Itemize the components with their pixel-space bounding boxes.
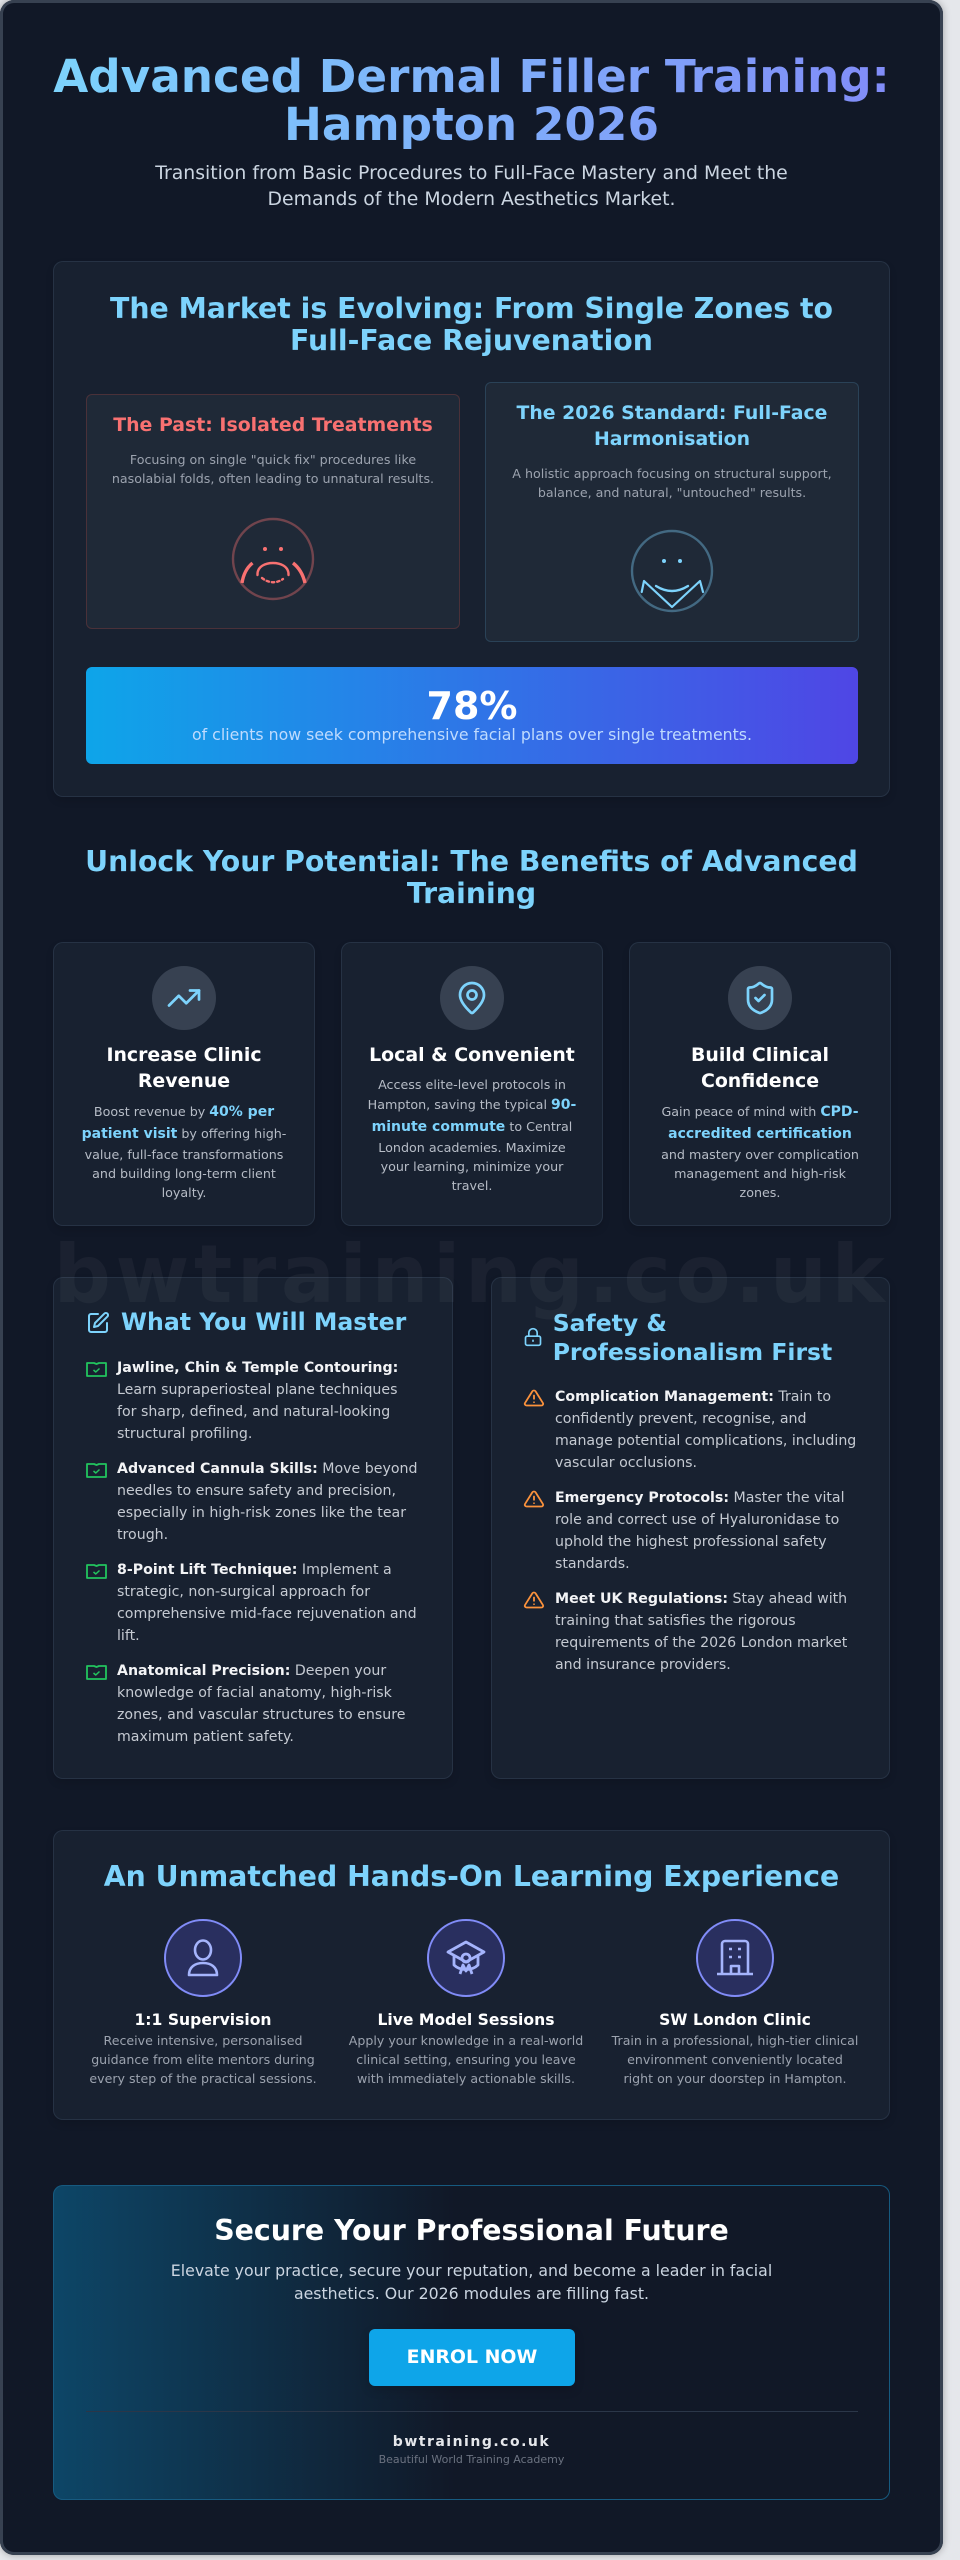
benefit text: minute commute to Central <box>372 1119 572 1135</box>
feature text: every step of the practical sessions. <box>89 2071 317 2086</box>
feature text: with immediately actionable skills. <box>357 2071 575 2086</box>
benefit card: confidence <box>629 942 891 1226</box>
list text: especially in high-risk zones like the tear <box>117 1505 406 1521</box>
list text: knowledge of facial anatomy, high-risk <box>117 1685 392 1701</box>
benefit text: Gain peace of mind with CPD- <box>661 1104 859 1120</box>
benefit card: local <box>341 942 603 1226</box>
benefit text: value, full-face transformations <box>85 1146 283 1162</box>
benefit text: your learning, minimize your <box>381 1159 563 1174</box>
feature text: clinical setting, ensuring you leave <box>356 2052 576 2067</box>
title: Advanced Dermal Filler Training: <box>53 50 890 103</box>
list text: Emergency Protocols: Master the vital <box>555 1490 845 1506</box>
benefit title: Increase Clinic <box>106 1044 262 1066</box>
list text: training that satisfies the rigorous <box>555 1612 796 1628</box>
list text: vascular occlusions. <box>555 1454 697 1470</box>
card: the 2026 standard <box>485 382 859 642</box>
panel: safety <box>491 1277 890 1779</box>
icon: pencil square <box>88 1312 109 1333</box>
heading: experience: An Unmatched Hands-On Learning Experience <box>104 1860 839 1893</box>
icon: check <box>86 1665 107 1680</box>
list item: emergency <box>524 1490 845 1572</box>
benefit title: Confidence <box>701 1070 819 1092</box>
feature text <box>341 2031 591 2088</box>
list text: Learn supraperiosteal plane techniques <box>117 1382 397 1398</box>
icon: check <box>86 1463 107 1478</box>
card text: past: Focusing on single "quick fix" procedures like <box>130 452 416 467</box>
benefit text: accredited certification <box>668 1126 852 1142</box>
subtitle: Demands of the Modern Aesthetics Market. <box>268 188 675 210</box>
panel: hands-on experience <box>53 1830 890 2120</box>
card heading: 2026 standard: The 2026 Standard: Full-Face <box>517 403 827 424</box>
icon: graduation cap <box>427 1919 505 1997</box>
feature text <box>78 2031 328 2088</box>
heading: master: What You Will Master <box>121 1308 406 1336</box>
feature title: 1:1 Supervision <box>134 2011 272 2029</box>
cta text <box>53 2260 890 2305</box>
card text: 2026 standard: balance, and natural, "untouched" results. <box>538 485 806 500</box>
card heading: past: The Past: Isolated Treatments <box>113 414 433 436</box>
list item: lift <box>86 1562 417 1644</box>
benefit text: patient visit by offering high- <box>82 1126 286 1142</box>
card text: past: nasolabial folds, often leading to unnatural results. <box>112 471 434 486</box>
panel: market evolving <box>53 261 890 797</box>
heading: benefits: Unlock Your Potential: The Benefits of Advanced <box>85 845 858 878</box>
academy name: Beautiful World Training Academy <box>379 2453 564 2466</box>
feature text: Receive intensive, personalised <box>104 2033 302 2048</box>
benefit text <box>661 1104 859 1200</box>
benefit text: loyalty. <box>162 1184 206 1200</box>
feature text: right on your doorstep in Hampton. <box>624 2071 846 2086</box>
card text: 2026 standard: A holistic approach focusing on structural support, <box>512 466 832 481</box>
list text: and insurance providers. <box>555 1656 731 1672</box>
subtitle <box>155 162 788 210</box>
stat number: 78% <box>427 684 517 728</box>
icon: map pin <box>440 966 504 1030</box>
list text: requirements of the 2026 London market <box>555 1634 847 1650</box>
feature text: environment conveniently located <box>627 2052 843 2067</box>
heading: market <box>110 292 833 356</box>
feature text: Train in a professional, high-tier clinical <box>612 2033 858 2048</box>
list text: needles to ensure safety and precision, <box>117 1483 396 1499</box>
icon: isolated treatment face <box>232 518 314 600</box>
list text: manage potential complications, including <box>555 1432 856 1448</box>
benefit title: Build Clinical <box>691 1044 829 1066</box>
card heading: 2026 standard: Harmonisation <box>594 429 750 450</box>
list text: structural profiling. <box>117 1426 252 1442</box>
list text: Advanced Cannula Skills: Move beyond <box>117 1461 417 1477</box>
list item: complications <box>524 1388 856 1470</box>
list text: trough. <box>117 1527 168 1543</box>
button: enrol now <box>369 2329 575 2386</box>
benefit text: management and high-risk <box>674 1166 846 1180</box>
list text <box>117 1663 405 1745</box>
heading: benefits <box>85 845 858 910</box>
card: the past <box>86 394 460 629</box>
card text: 2026 standard <box>512 466 832 500</box>
panel: call to action <box>53 2185 890 2500</box>
list text <box>555 1490 845 1572</box>
card text: past <box>112 452 434 486</box>
benefit text: travel. <box>452 1178 492 1193</box>
icon: harmonised face <box>630 530 714 612</box>
icon: check <box>86 1362 107 1377</box>
benefit title: Local & Convenient <box>369 1044 575 1066</box>
benefit text <box>368 1077 576 1193</box>
list text <box>116 1360 398 1442</box>
list text <box>555 1388 856 1470</box>
list text: zones, and vascular structures to ensure <box>117 1707 405 1723</box>
icon: shield check <box>728 966 792 1030</box>
list text: standards. <box>555 1556 630 1572</box>
icon: person <box>164 1919 242 1997</box>
icon: building <box>696 1919 774 1997</box>
benefit text <box>82 1104 286 1200</box>
watermark: bwtraining.co.uk <box>54 1228 889 1321</box>
list text: Meet UK Regulations: Stay ahead with <box>555 1590 847 1606</box>
list text: Jawline, Chin & Temple Contouring: <box>117 1360 398 1376</box>
list text: Anatomical Precision: Deepen your <box>117 1663 386 1679</box>
benefit text: Boost revenue by 40% per <box>94 1104 274 1120</box>
heading: safety: Professionalism First <box>553 1338 832 1366</box>
button: enrol now: ENROL NOW <box>407 2346 537 2368</box>
benefit text: and mastery over complication <box>661 1146 859 1162</box>
heading: market: Full-Face Rejuvenation <box>290 324 653 356</box>
benefit card: revenue <box>53 942 315 1226</box>
list text: strategic, non-surgical approach for <box>117 1584 370 1600</box>
feature title: SW London Clinic <box>659 2011 811 2029</box>
heading: safety <box>553 1309 832 1366</box>
feature text: Apply your knowledge in a real-world <box>349 2033 583 2048</box>
list item: anatomy <box>86 1663 405 1745</box>
benefit text: London academies. Maximize <box>378 1140 566 1155</box>
list text <box>117 1461 417 1543</box>
icon: trending up <box>152 966 216 1030</box>
list text: Complication Management: Train to <box>555 1388 831 1404</box>
title <box>53 50 890 151</box>
icon: warning <box>524 1390 544 1406</box>
title: Hampton 2026 <box>284 98 659 151</box>
list text: role and correct use of Hyaluronidase to <box>555 1512 839 1528</box>
stat banner <box>86 667 858 764</box>
list text: maximum patient safety. <box>117 1729 294 1745</box>
benefit text: and building long-term client <box>92 1166 276 1180</box>
panel: what you will master <box>53 1277 453 1779</box>
feature: supervision <box>78 1919 328 2089</box>
list item: jawline <box>86 1360 398 1442</box>
list text <box>117 1562 417 1644</box>
icon: check <box>86 1564 107 1579</box>
icon: warning <box>524 1490 544 1508</box>
website: bwtraining.co.uk <box>393 2434 550 2450</box>
benefit title <box>691 1044 829 1092</box>
feature title: Live Model Sessions <box>377 2011 554 2029</box>
icon: warning <box>524 1592 544 1608</box>
cta text: Elevate your practice, secure your reputation, and become a leader in facial <box>171 2261 772 2280</box>
heading: market: The Market is Evolving: From Single Zones to <box>110 292 833 325</box>
benefit text: zones. <box>740 1184 780 1200</box>
benefit text: Hampton, saving the typical 90- <box>368 1097 576 1113</box>
list text: lift. <box>117 1628 140 1644</box>
cta heading: Secure Your Professional Future <box>214 2214 729 2247</box>
stat caption: of clients now seek comprehensive facial plans over single treatments. <box>192 724 752 744</box>
feature: clinic <box>610 1919 860 2089</box>
feature text: guidance from elite mentors during <box>91 2052 315 2067</box>
icon: lock <box>524 1328 542 1346</box>
list text: uphold the highest professional safety <box>555 1534 827 1550</box>
list item: regulations <box>524 1590 847 1672</box>
benefit text: Access elite-level protocols in <box>378 1077 566 1092</box>
feature text <box>610 2031 860 2088</box>
heading: safety: Safety & <box>553 1309 667 1337</box>
benefit title: Revenue <box>138 1070 230 1092</box>
cta text: aesthetics. Our 2026 modules are filling fast. <box>294 2284 649 2302</box>
card heading: 2026 standard <box>516 403 827 450</box>
subtitle: Transition from Basic Procedures to Full-Face Mastery and Meet the <box>155 162 788 184</box>
list text: 8-Point Lift Technique: Implement a <box>117 1562 392 1578</box>
list item: cannula <box>86 1461 417 1543</box>
list text: confidently prevent, recognise, and <box>555 1410 806 1426</box>
list text: for sharp, defined, and natural-looking <box>117 1404 390 1420</box>
feature: live models <box>341 1919 591 2089</box>
heading: benefits: Training <box>407 876 536 910</box>
list text <box>555 1588 847 1676</box>
list text: comprehensive mid-face rejuvenation and <box>117 1606 417 1622</box>
benefit title <box>106 1044 262 1092</box>
